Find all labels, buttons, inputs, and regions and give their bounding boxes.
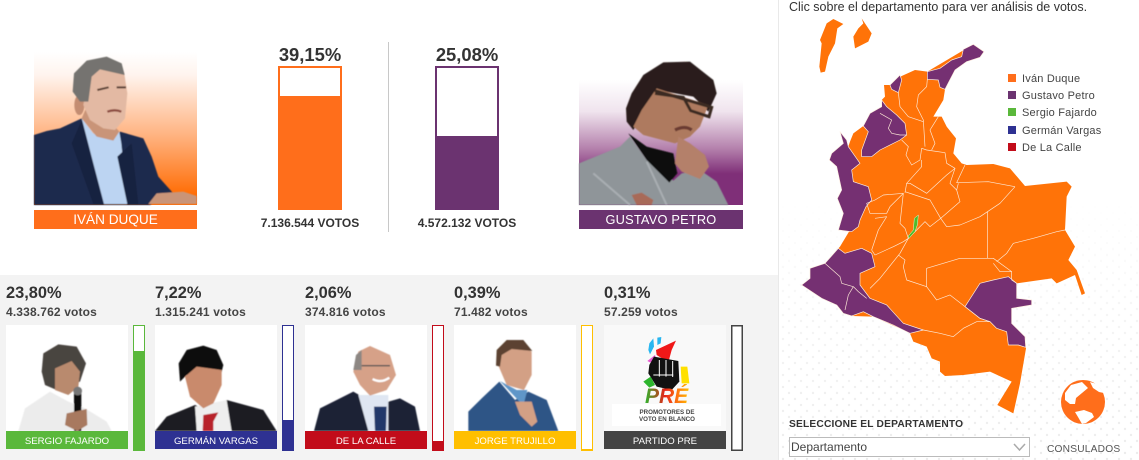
- logo: PRE: PROMOTORES DE: [640, 409, 694, 416]
- bar: Petro 25,08%: [418, 44, 516, 230]
- panel divider: [778, 0, 779, 460]
- name label: De La Calle: DE LA CALLE: [336, 436, 396, 447]
- card: De La Calle: 2,06%: [305, 284, 352, 302]
- map: Risaralda green: [908, 215, 918, 239]
- island: San Andrés: [819, 19, 843, 73]
- legend: [1008, 73, 1102, 154]
- photo: Jorge Trujillo: [468, 340, 558, 431]
- card: De La Calle: 374.816 votos: [305, 305, 386, 319]
- card: Jorge Trujillo: 0,39%: [454, 284, 501, 302]
- card: Jorge Trujillo: 71.482 votos: [454, 305, 528, 319]
- bar: Trujillo: [581, 326, 593, 451]
- card: De La Calle: [305, 284, 444, 451]
- bar: Petro 25,08%: 25,08%: [436, 44, 498, 65]
- map: mainland orange: [802, 44, 1085, 413]
- legend: Sergio Fajardo: Sergio Fajardo: [1022, 107, 1097, 119]
- photo: Germán Vargas: [155, 346, 277, 431]
- logo: PRE: PRÉ: [645, 385, 689, 408]
- dropdown: Departamento: [790, 438, 1030, 456]
- bar: Duque 39,15%: 39,15%: [279, 44, 341, 65]
- legend: De La Calle: De La Calle: [1022, 142, 1082, 154]
- legend: Iván Duque: Iván Duque: [1022, 73, 1080, 85]
- photo: Gustavo Petro: [579, 62, 743, 205]
- map: purple departments: [802, 44, 1032, 347]
- bar: Petro 25,08%: 4.572.132 VOTOS: [418, 216, 516, 230]
- card: Sergio Fajardo: 23,80%: [6, 284, 62, 302]
- panel: other candidates background: [0, 275, 778, 460]
- card: Germán Vargas: [155, 284, 294, 451]
- legend: Gustavo Petro: Gustavo Petro: [1022, 90, 1095, 102]
- map: department borders: [825, 79, 1065, 337]
- legend: Germán Vargas: Germán Vargas: [1022, 125, 1102, 137]
- name label: Germán Vargas: [155, 431, 277, 449]
- bar: Duque 39,15%: 7.136.544 VOTOS: [261, 216, 359, 230]
- name label: Iván Duque: [34, 210, 197, 229]
- name label: Jorge Trujillo: JORGE TRUJILLO: [475, 436, 555, 447]
- name label: Partido PRE: [604, 431, 726, 449]
- card: Partido PRE: 57.259 votos: [604, 305, 678, 319]
- name label: Jorge Trujillo: [454, 431, 576, 449]
- link: consulados: CONSULADOS: [1047, 444, 1120, 455]
- card: Jorge Trujillo: [454, 284, 593, 451]
- name label: Iván Duque: IVÁN DUQUE: [73, 212, 158, 227]
- name label: Sergio Fajardo: [6, 431, 128, 449]
- vertical divider: [388, 42, 389, 232]
- card: Germán Vargas: 7,22%: [155, 284, 202, 302]
- name label: Gustavo Petro: GUSTAVO PETRO: [606, 212, 716, 227]
- card: Sergio Fajardo: [6, 284, 145, 451]
- photo: De La Calle: [314, 346, 420, 431]
- island: Providencia: [853, 18, 872, 48]
- name label: Partido PRE: PARTIDO PRE: [633, 436, 697, 447]
- bar: De La Calle: [432, 326, 444, 451]
- photo: Sergio Fajardo: [18, 344, 112, 431]
- bar: Vargas: [282, 326, 294, 451]
- bar: PRE: [732, 326, 742, 450]
- bar: Duque 39,15%: [261, 44, 359, 230]
- name label: De La Calle: [305, 431, 427, 449]
- heading: select department: SELECCIONE EL DEPARTAMENTO: [789, 419, 963, 430]
- card: Partido PRE: [604, 284, 742, 450]
- card: Germán Vargas: 1.315.241 votos: [155, 305, 246, 319]
- logo: PRE: VOTO EN BLANCO: [639, 416, 695, 423]
- bar: Fajardo: [133, 326, 145, 451]
- panel: map background dots: [782, 297, 1138, 460]
- icon: globe: [1061, 380, 1105, 424]
- name label: Sergio Fajardo: SERGIO FAJARDO: [25, 436, 109, 447]
- instruction text: Clic sobre el departamento para ver análisis de votos.: [789, 0, 1087, 14]
- card: Partido PRE: 0,31%: [604, 284, 651, 302]
- dropdown: Departamento: Departamento: [791, 440, 867, 454]
- logo: PRE: [612, 337, 721, 426]
- name label: Germán Vargas: GERMÁN VARGAS: [174, 436, 258, 447]
- panel: Gustavo Petro: [579, 62, 743, 229]
- photo: Iván Duque: [34, 52, 197, 205]
- name label: Gustavo Petro: [579, 210, 743, 229]
- panel: Iván Duque: [34, 52, 197, 229]
- map: Colombia departments: [802, 18, 1085, 413]
- card: Sergio Fajardo: 4.338.762 votos: [6, 305, 97, 319]
